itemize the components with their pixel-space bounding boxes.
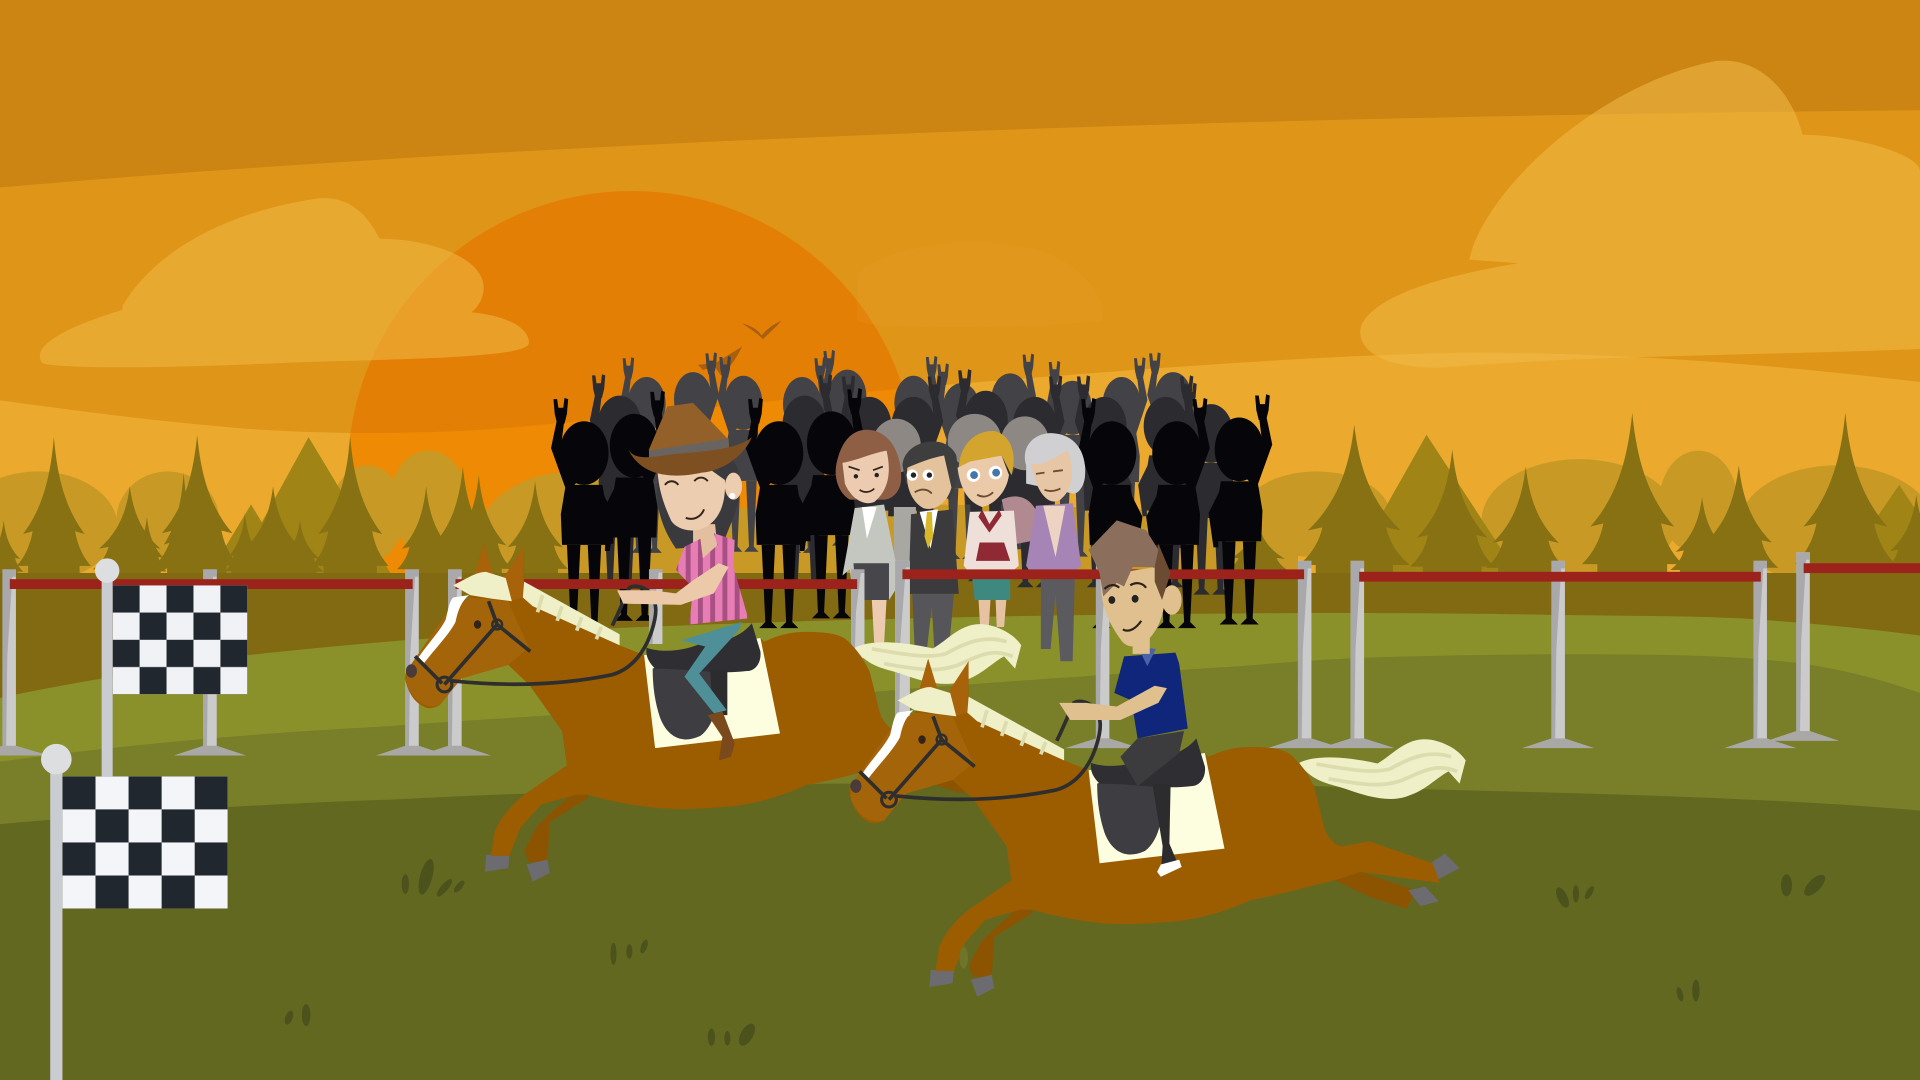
- checkered flag: near: [41, 744, 228, 1080]
- distant mountains: [208, 435, 1920, 576]
- horse: left: [405, 544, 1021, 882]
- tree line: [0, 413, 1920, 592]
- spectator: man in black suit: [902, 441, 959, 649]
- crowd: front row silhouettes: [551, 388, 1272, 628]
- birds: [698, 321, 781, 376]
- fence: left section: [0, 569, 864, 756]
- grass: light band: [0, 613, 1920, 1080]
- grass: middle band: [0, 654, 1920, 1080]
- cloud: right: [1360, 61, 1920, 368]
- checkered flag: far: [95, 558, 247, 778]
- sun: [348, 191, 901, 573]
- ground behind fence: [0, 573, 1920, 735]
- cloud: faint centre: [857, 242, 1103, 327]
- cloud: left: [40, 198, 529, 367]
- horse: right: [850, 659, 1466, 997]
- fence: middle and right sections: [895, 552, 1920, 748]
- spectator: older woman in purple cardigan: [1025, 433, 1085, 661]
- distant hills: [0, 451, 1920, 606]
- rider: woman in cowboy hat: [617, 403, 752, 760]
- crowd: grey people behind spectators: [872, 414, 1049, 588]
- crowd: middle row silhouettes: [590, 369, 1239, 595]
- rider: boy in blue shirt: [1059, 520, 1188, 877]
- grass tufts: [283, 857, 1829, 1048]
- spectator: woman in grey jacket: [836, 430, 901, 644]
- crowd: back row silhouettes: [621, 350, 1197, 559]
- grass: foreground: [0, 784, 1920, 1080]
- spectator: blond woman in hoodie: [958, 431, 1019, 637]
